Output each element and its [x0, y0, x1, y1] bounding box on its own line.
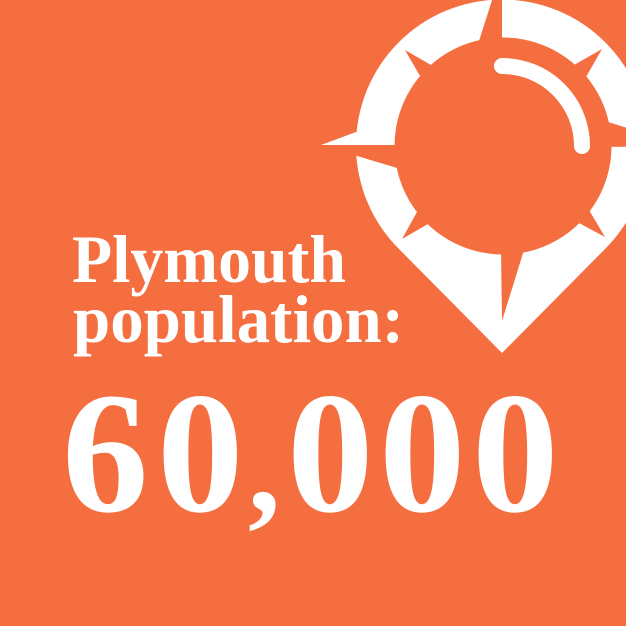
- population figure: 60: [62, 358, 244, 549]
- pin body: [356, 0, 626, 353]
- heading: Plymouth population: [72, 221, 404, 357]
- heading: Plymouth population: population:: [73, 281, 404, 357]
- population figure: [62, 358, 558, 549]
- compass dial and points: [321, 0, 626, 321]
- compass highlight arc: [502, 66, 582, 146]
- left white compass point: [321, 132, 396, 145]
- heading: Plymouth population: Plymouth: [72, 221, 346, 297]
- icon: compass map pin: [321, 0, 626, 353]
- population figure: 000: [287, 358, 558, 549]
- population figure: ,: [248, 396, 280, 540]
